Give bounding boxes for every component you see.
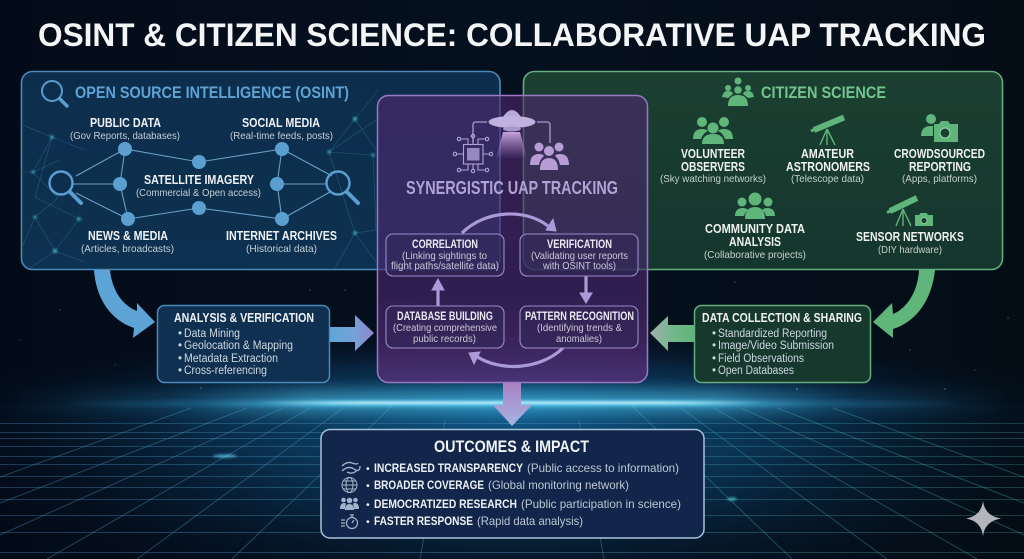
cycle: verification <box>520 234 638 276</box>
outcome: broader coverage: • <box>366 480 370 492</box>
cycle: correlation: (Linking sightings to <box>402 250 487 262</box>
analysis list: • <box>178 328 182 340</box>
outcome: faster response <box>366 514 583 528</box>
item: volunteer observers: OBSERVERS <box>681 160 745 174</box>
outcome: broader coverage <box>366 478 629 492</box>
outcome: faster response: (Rapid data analysis) <box>477 514 583 528</box>
cycle: verification: with OSINT tools) <box>542 260 616 272</box>
item: amateur astronomers: (Telescope data) <box>791 173 864 185</box>
source: news and media: (Articles, broadcasts) <box>81 243 174 255</box>
item: sensor networks <box>856 198 964 256</box>
item: crowdsourced reporting: REPORTING <box>909 160 971 174</box>
cycle: database building: DATABASE BUILDING <box>397 311 493 323</box>
icon: right magnifier <box>326 172 358 203</box>
panel: analysis and verification: ANALYSIS & VERIFICATION <box>174 311 314 325</box>
outcome: increased transparency: • <box>366 463 370 475</box>
source: public data: PUBLIC DATA <box>90 116 161 130</box>
data collection list: • <box>712 353 716 365</box>
cycle: database building <box>386 306 504 348</box>
source: satellite imagery <box>136 173 261 199</box>
cycle: pattern recognition: PATTERN RECOGNITION <box>525 311 634 323</box>
analysis list: Metadata Extraction <box>184 353 278 365</box>
item: amateur astronomers: AMATEUR <box>801 147 854 161</box>
data collection list: Image/Video Submission <box>718 340 834 352</box>
constellation decoration <box>23 90 378 268</box>
analysis list: Cross-referencing <box>184 365 267 377</box>
icon: citizen science group <box>722 78 754 106</box>
outcome: broader coverage: BROADER COVERAGE <box>374 478 484 492</box>
item: community data analysis: COMMUNITY DATA <box>705 222 805 236</box>
outcome: increased transparency <box>366 461 679 475</box>
source: social media <box>230 116 333 142</box>
panel: data collection and sharing: DATA COLLECTION & SHARING <box>702 311 862 325</box>
icon: handshake <box>342 462 360 473</box>
icon: globe <box>342 478 357 492</box>
panel: analysis and verification <box>158 306 330 382</box>
item: sensor networks: (DIY hardware) <box>878 244 942 256</box>
outcome: democratized research: (Public participation in science) <box>521 497 681 511</box>
network diagram <box>50 142 358 226</box>
data collection list: Open Databases <box>718 365 794 377</box>
icon: left magnifier <box>50 172 81 203</box>
panel: data collection and sharing <box>694 306 870 382</box>
panel: synergistic UAP tracking <box>378 96 648 382</box>
analysis list: • <box>178 340 182 352</box>
item: volunteer observers: (Sky watching networks) <box>660 173 766 185</box>
analysis list: Data Mining <box>184 328 240 340</box>
title: OSINT & CITIZEN SCIENCE: COLLABORATIVE UAP TRACKING <box>38 17 986 53</box>
analysis list <box>178 328 293 377</box>
analysis list: Geolocation & Mapping <box>184 340 293 352</box>
icon: stopwatch <box>341 515 358 528</box>
panel: citizen science <box>524 72 1002 270</box>
analysis list: • <box>178 365 182 377</box>
icon: UFO with beam, chip and people <box>453 110 569 173</box>
cycle: correlation <box>386 234 504 276</box>
arrow: OSINT to analysis <box>94 270 155 338</box>
outcome: increased transparency: (Public access to information) <box>527 461 679 475</box>
item: amateur astronomers: ASTRONOMERS <box>786 160 870 174</box>
outcome: democratized research: • <box>366 499 370 511</box>
outcome: faster response: • <box>366 516 370 528</box>
data collection list <box>712 328 834 377</box>
item: crowdsourced reporting <box>894 114 985 185</box>
data collection list: Standardized Reporting <box>718 328 827 340</box>
outcome: increased transparency: INCREASED TRANSPARENCY <box>374 461 523 475</box>
item: crowdsourced reporting: (Apps, platforms) <box>902 173 977 185</box>
item: community data analysis: ANALYSIS <box>729 235 781 249</box>
cycle: database building: public records) <box>413 333 476 345</box>
icon: heading magnifier <box>42 81 67 106</box>
horizon glow <box>0 390 1024 414</box>
heading: OSINT: OPEN SOURCE INTELLIGENCE (OSINT) <box>75 83 349 102</box>
heading: citizen science: CITIZEN SCIENCE <box>761 83 886 102</box>
data collection list: Field Observations <box>718 353 804 365</box>
item: volunteer observers <box>660 117 766 185</box>
arrow: citizen science to data collection <box>873 270 935 338</box>
background: perspective grid floor <box>0 404 1024 559</box>
source: satellite imagery: SATELLITE IMAGERY <box>144 173 255 187</box>
source: satellite imagery: (Commercial & Open access) <box>136 187 261 199</box>
cycle: correlation: flight paths/satellite data) <box>391 260 499 272</box>
panel: open source intelligence <box>22 72 500 270</box>
cycle: pattern recognition: (Identifying trends & <box>537 322 622 334</box>
icon: people <box>340 498 359 510</box>
outcome: faster response: FASTER RESPONSE <box>374 514 473 528</box>
item: volunteer observers: VOLUNTEER <box>681 147 745 161</box>
source: news and media: NEWS & MEDIA <box>88 229 168 243</box>
analysis list: • <box>178 353 182 365</box>
data collection list: • <box>712 340 716 352</box>
cycle: verification: VERIFICATION <box>547 239 612 251</box>
cycle: pattern recognition <box>520 306 638 348</box>
cycle: database building: (Creating comprehensive <box>393 322 497 334</box>
item: amateur astronomers <box>786 118 870 185</box>
cycle: verification: (Validating user reports <box>531 250 628 262</box>
source: internet archives: INTERNET ARCHIVES <box>226 229 337 243</box>
cycle: correlation: CORRELATION <box>412 239 478 251</box>
arrow: analysis to center <box>330 315 374 351</box>
outcome: democratized research <box>366 497 681 511</box>
item: community data analysis <box>704 192 806 261</box>
arrow: data collection to center <box>650 316 694 351</box>
icon: sparkle watermark <box>966 501 1001 536</box>
data collection list: • <box>712 365 716 377</box>
source: news and media <box>81 229 174 255</box>
arrow: center to outcomes <box>493 383 532 426</box>
cycle: pattern recognition: anomalies) <box>556 333 602 345</box>
outcome: democratized research: DEMOCRATIZED RESEARCH <box>374 497 517 511</box>
source: social media: SOCIAL MEDIA <box>242 116 320 130</box>
heading: outcomes: OUTCOMES & IMPACT <box>434 437 590 456</box>
data collection list: • <box>712 328 716 340</box>
source: public data <box>70 116 180 142</box>
source: internet archives: (Historical data) <box>246 243 317 255</box>
item: crowdsourced reporting: CROWDSOURCED <box>894 147 985 161</box>
source: internet archives <box>226 229 337 255</box>
outcome: broader coverage: (Global monitoring network) <box>488 478 629 492</box>
panel: outcomes and impact <box>321 430 704 538</box>
heading: synergistic UAP tracking: SYNERGISTIC UAP TRACKING <box>406 178 618 198</box>
item: sensor networks: SENSOR NETWORKS <box>856 230 964 244</box>
source: public data: (Gov Reports, databases) <box>70 130 180 142</box>
item: community data analysis: (Collaborative projects) <box>704 249 806 261</box>
cycle arrows <box>432 214 592 366</box>
source: social media: (Real-time feeds, posts) <box>230 130 333 142</box>
